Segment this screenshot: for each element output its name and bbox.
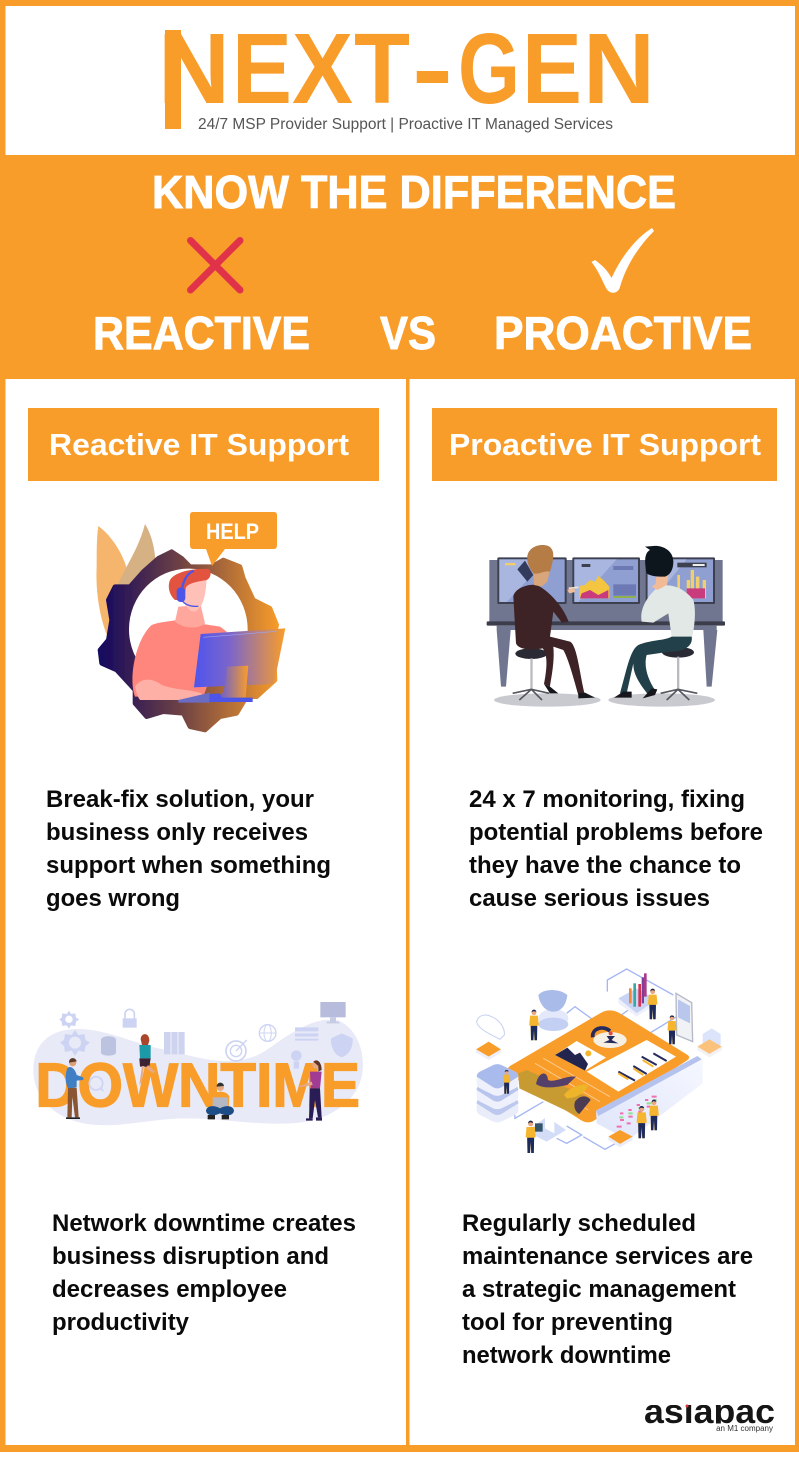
panel heading: proactive IT support	[432, 408, 777, 481]
text: downtime description	[52, 1210, 356, 1336]
text: maintenance description: tool for preventing	[462, 1309, 673, 1336]
logo tagline: 24/7 MSP Provider Support | Proactive IT Managed Services	[198, 116, 613, 133]
logo wordmark	[158, 13, 655, 125]
text: downtime description: business disruption and	[52, 1243, 329, 1270]
text: proactive description: they have the chance to	[469, 852, 741, 879]
text: downtime description: decreases employee	[52, 1276, 287, 1303]
text: proactive description: potential problems before	[469, 819, 763, 846]
text: reactive description: goes wrong	[46, 885, 180, 912]
text: downtime description: Network downtime creates	[52, 1210, 356, 1237]
logo wordmark: T	[354, 13, 410, 125]
logo wordmark: -	[412, 13, 453, 125]
text: downtime description: productivity	[52, 1309, 189, 1336]
illustration: help desk agent	[96, 524, 285, 730]
text: maintenance description: maintenance services are	[462, 1243, 753, 1270]
logo: NEXT-GEN	[158, 13, 655, 133]
heading: proactive: PROACTIVE	[494, 307, 752, 359]
text: maintenance description: a strategic management	[462, 1276, 736, 1303]
logo wordmark: X	[292, 13, 353, 125]
panel heading: proactive IT support: Proactive IT Support	[449, 427, 761, 462]
logo: asiapac: an M1 company	[716, 1424, 773, 1433]
logo wordmark: E	[522, 13, 582, 125]
figure: man standing left	[66, 1058, 83, 1119]
illustration: downtime	[33, 1002, 363, 1125]
heading: reactive: REACTIVE	[93, 307, 310, 359]
logo wordmark: N	[583, 13, 655, 125]
heading: vs: VS	[380, 307, 436, 359]
text: reactive description: support when something	[46, 852, 331, 879]
text: proactive description: 24 x 7 monitoring, fixing	[469, 786, 745, 813]
speech bubble: HELP	[190, 512, 277, 566]
logo wordmark: N	[158, 13, 230, 125]
illustration: two engineers at monitors	[487, 545, 725, 707]
panel heading: reactive IT support: Reactive IT Support	[49, 427, 349, 462]
text: proactive description	[469, 786, 763, 912]
speech bubble: HELP: HELP	[206, 519, 259, 544]
text: maintenance description: network downtime	[462, 1342, 671, 1369]
logo: asiapac: asiapac	[644, 1393, 775, 1431]
text: maintenance description: Regularly scheduled	[462, 1210, 696, 1237]
title: KNOW THE DIFFERENCE	[152, 166, 676, 218]
illustration: isometric network dashboard	[476, 969, 722, 1153]
icon: magnifier	[89, 1077, 103, 1091]
figure: woman standing right	[299, 1060, 322, 1121]
panel heading: reactive IT support	[28, 408, 379, 481]
text: reactive description	[46, 786, 331, 912]
figure: woman sitting on letters	[139, 1034, 155, 1085]
figure: man with laptop	[206, 1083, 234, 1119]
logo wordmark: G	[458, 13, 520, 125]
text: maintenance description	[462, 1210, 753, 1369]
text: reactive description: Break-fix solution, your	[46, 786, 314, 813]
text: reactive description: business only receives	[46, 819, 308, 846]
icon: red cross	[190, 240, 240, 290]
icon: white check mark	[592, 228, 654, 293]
logo N stem	[165, 30, 181, 129]
word: DOWNTIME: DOWNTIME	[35, 1052, 360, 1121]
logo: asiapac	[645, 1404, 774, 1432]
logo wordmark: E	[232, 13, 292, 125]
text: proactive description: cause serious issues	[469, 885, 710, 912]
